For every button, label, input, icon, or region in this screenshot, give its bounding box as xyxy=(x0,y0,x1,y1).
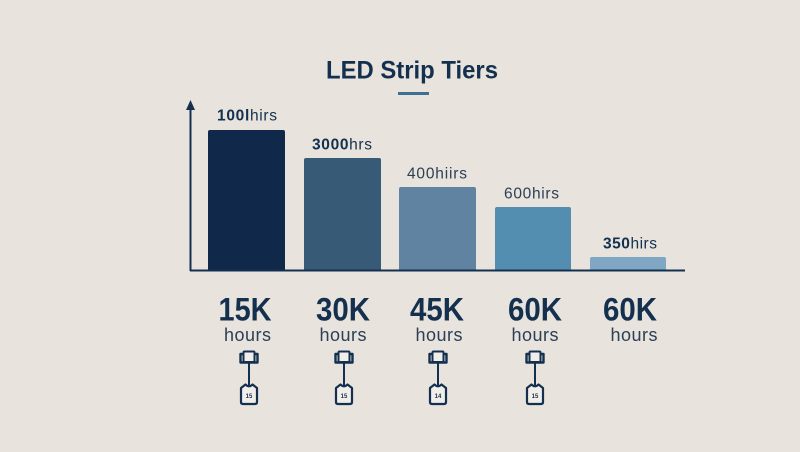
tier 1 value: 15K xyxy=(218,292,272,328)
icon: strip connector and tag 3 xyxy=(430,352,446,404)
tier 4 value: hours xyxy=(512,325,558,345)
icon: strip connector and tag 2 xyxy=(336,352,352,404)
y axis arrow xyxy=(186,100,195,271)
tier 3 value xyxy=(410,292,464,345)
icon: strip connector and tag 4: 15 xyxy=(532,394,539,400)
bar label 1: 100lhirs xyxy=(217,108,277,124)
icon: strip connector and tag 1: 15 xyxy=(246,394,253,400)
bar 1 xyxy=(208,130,285,271)
tier 1 value: hours xyxy=(224,325,271,345)
tier 2 value: hours xyxy=(320,325,366,345)
bar label 2: 3000hrs xyxy=(312,136,372,154)
icon: strip connector and tag 1 xyxy=(240,352,258,404)
icon: strip connector and tag 2: 15 xyxy=(341,394,348,400)
title underline xyxy=(398,92,429,95)
tier 3 value: 45K xyxy=(410,292,464,328)
bar 5 xyxy=(590,257,666,271)
bar 3 xyxy=(399,187,476,271)
tier 2 value xyxy=(316,292,370,345)
tier 4 value: 60K xyxy=(508,292,562,328)
bar 2 xyxy=(304,158,381,271)
bar label 5: 350hirs xyxy=(603,236,657,252)
tier 5 value xyxy=(603,292,658,345)
tier 5 value: hours xyxy=(610,325,658,345)
bar label 4: 600hirs xyxy=(504,186,559,202)
title: LED Strip Tiers xyxy=(326,56,498,84)
bar chart xyxy=(186,100,685,272)
icon: strip connector and tag 4 xyxy=(526,352,544,404)
bar 4 xyxy=(495,207,571,271)
tier 5 value: 60K xyxy=(603,292,657,328)
icon: strip connector and tag 3: 14 xyxy=(435,394,442,400)
tier 1 value xyxy=(218,292,272,345)
tier 2 value: 30K xyxy=(316,292,370,328)
tier 4 value xyxy=(508,292,562,345)
tier 3 value: hours xyxy=(416,325,462,345)
bar label 3: 400hiirs xyxy=(407,166,467,182)
baseline xyxy=(190,270,685,272)
